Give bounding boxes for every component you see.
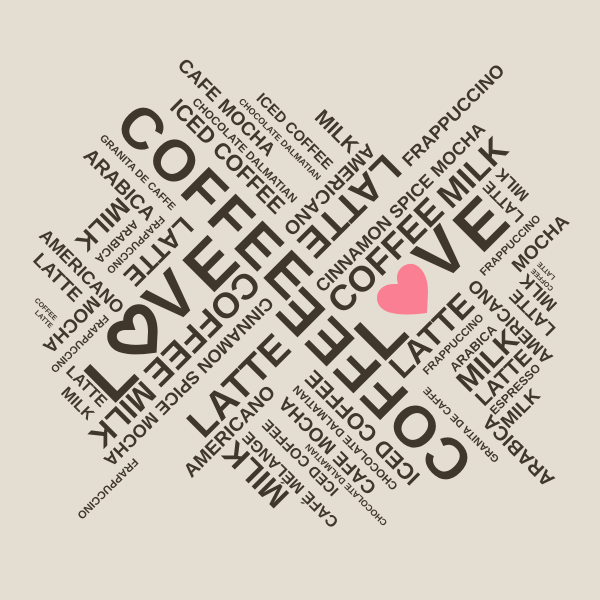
word: MILK large: MILK — [82, 374, 163, 455]
word: MILK: MILK — [70, 192, 136, 258]
word: LATTE tiny: LATTE — [536, 260, 557, 281]
word: MILK: MILK — [493, 164, 533, 204]
big word: LOVE left with dark heart: V — [129, 256, 212, 339]
word: AMERICANO: AMERICANO — [179, 381, 280, 482]
word: MILK large: MILK — [430, 130, 516, 216]
word: FRAPPUCCINO: FRAPPUCCINO — [104, 213, 167, 276]
word: MILK large: MILK — [215, 434, 296, 515]
big word: LOVE right with pink heart — [340, 182, 522, 374]
word: LATTE: LATTE — [505, 286, 559, 340]
big word: COFFEE: COFFEE — [104, 91, 326, 313]
word: COFFEE tiny: COFFEE — [530, 267, 555, 292]
word: CINNAMON SPICE MOCHA: CINNAMON SPICE MOCHA — [312, 119, 489, 296]
word: LATTE: LATTE — [118, 211, 199, 292]
big word: LOVE left with dark heart — [70, 222, 252, 416]
word: FRAPPUCCINO: FRAPPUCCINO — [398, 60, 509, 171]
icon: dark heart — [112, 309, 153, 350]
word: LATTE tiny: LATTE — [33, 309, 54, 330]
word: MOCHA: MOCHA — [38, 291, 104, 357]
word: COFFEE tiny: COFFEE — [33, 297, 58, 322]
word: LATTE large: LATTE — [289, 146, 409, 266]
word: MILK: MILK — [497, 385, 545, 433]
big word: LOVE right with pink heart: L — [340, 293, 421, 374]
word: ESPRESSO: ESPRESSO — [487, 361, 544, 418]
big word: LOVE right with pink heart: E — [439, 182, 522, 265]
word: AMERICANO: AMERICANO — [279, 139, 380, 240]
word: FRAPPUCCINO: FRAPPUCCINO — [74, 456, 140, 521]
word: MILK: MILK — [57, 384, 97, 424]
word: FRAPPUCCINO: FRAPPUCCINO — [48, 312, 111, 375]
word: ICED COFFEE: ICED COFFEE — [165, 94, 290, 219]
word: LATTE: LATTE — [381, 285, 481, 385]
big word: LOVE right with pink heart: V — [399, 212, 482, 295]
word: ICED COFFEE upper: ICED COFFEE — [253, 90, 336, 173]
word: CHOCOLATE DALMATIAN: CHOCOLATE DALMATIAN — [291, 383, 400, 492]
word: ICED COFFEE: ICED COFFEE — [259, 416, 342, 499]
word: LATTE: LATTE — [62, 363, 110, 411]
word: LATTE: LATTE — [470, 344, 537, 411]
word: LATTE: LATTE — [28, 249, 86, 307]
big word: COFFEE reversed: COFFEE — [263, 274, 485, 496]
word: MILK: MILK — [516, 270, 561, 315]
word: LATTE large: LATTE — [179, 326, 299, 446]
word: CHOCOLATE DALMATIAN small: CHOCOLATE DALMATIAN — [237, 96, 323, 182]
word: GRANITA DE CAFFE: GRANITA DE CAFFE — [421, 384, 502, 465]
word: FRAPPUCCINO: FRAPPUCCINO — [421, 312, 487, 377]
big word: LOVE left with dark heart: E — [169, 222, 252, 305]
word: ARABICA: ARABICA — [447, 321, 500, 375]
word: ARABICA: ARABICA — [79, 144, 160, 225]
word: CAFE MOCHA: CAFE MOCHA — [275, 392, 381, 498]
word: ARABICA: ARABICA — [478, 410, 559, 491]
word: MILK: MILK — [450, 323, 526, 399]
word: LATTE: LATTE — [480, 177, 528, 225]
big word: LOVE left with dark heart: L — [70, 335, 151, 416]
word: GRANITA DE CAFFE: GRANITA DE CAFFE — [97, 132, 178, 213]
word: FRAPPUCCINO: FRAPPUCCINO — [478, 213, 544, 278]
word: CHOCOLATE DALMATIAN: CHOCOLATE DALMATIAN — [190, 96, 299, 205]
word: AMERICANO: AMERICANO — [464, 275, 557, 368]
word: CAFE MOCHA: CAFE MOCHA — [173, 55, 279, 161]
word: COFFEE medium: COFFEE — [137, 263, 269, 395]
word: ARABICA small: ARABICA — [92, 217, 141, 267]
icon: pink heart — [377, 264, 428, 314]
word: CAFÉ MÉLANGE: CAFÉ MÉLANGE — [238, 428, 342, 532]
word: CHOCOLATE DALMATIAN small: CHOCOLATE DALMATIAN — [303, 442, 389, 528]
word: MOCHA: MOCHA — [508, 211, 574, 277]
word: AMERICANO: AMERICANO — [35, 225, 128, 318]
word: MILK top: MILK — [310, 105, 363, 158]
word: ICED COFFEE: ICED COFFEE — [300, 365, 425, 490]
word: COFFEE medium: COFFEE — [319, 189, 451, 321]
word: CINNAMON SPICE MOCHA: CINNAMON SPICE MOCHA — [100, 293, 277, 470]
